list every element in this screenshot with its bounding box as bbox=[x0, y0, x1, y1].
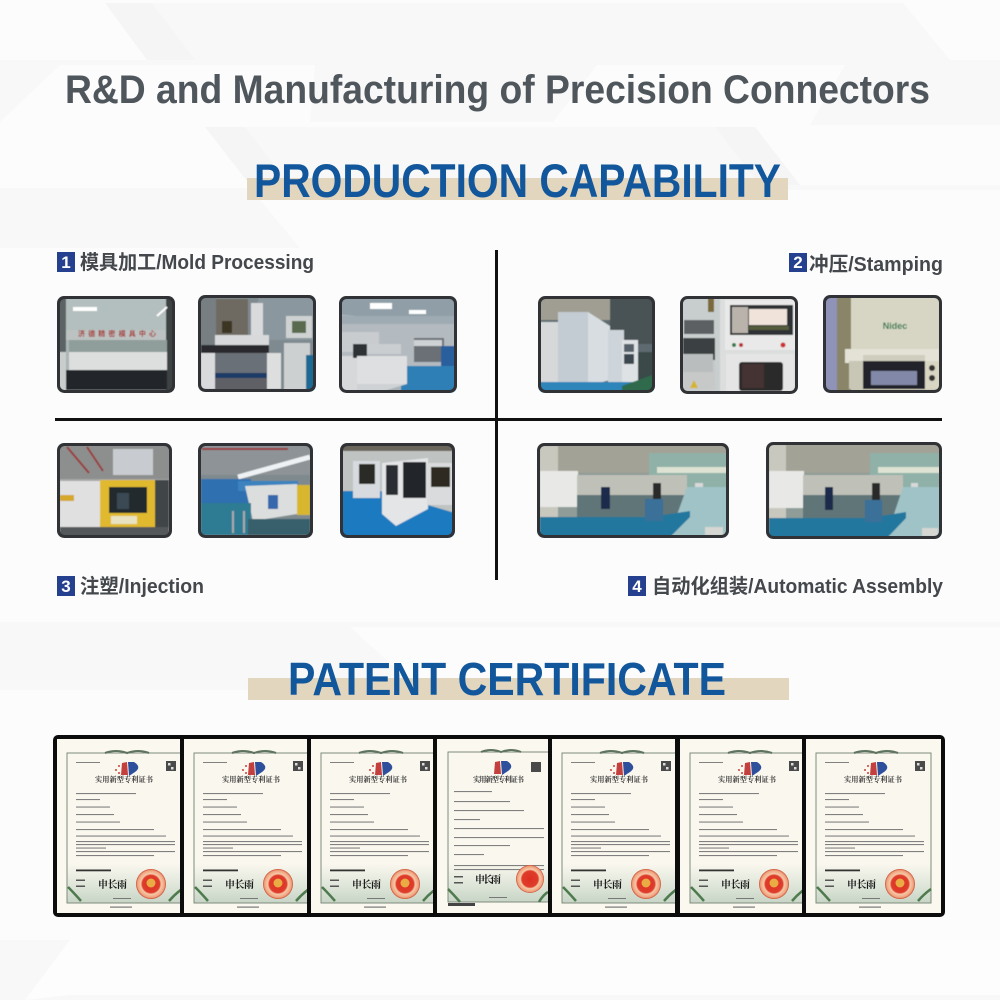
photo: stamping cabinets bbox=[538, 296, 655, 393]
label: stamping: 2 bbox=[793, 253, 803, 272]
photo: yellow injection machine bbox=[57, 443, 172, 538]
photo: mold center glass wall: 济德精密模具中心 bbox=[78, 329, 156, 338]
certificate 6 bbox=[680, 739, 802, 913]
certificate 4 bbox=[437, 739, 548, 913]
section 4: automatic assembly bbox=[537, 442, 944, 598]
certificate 5: 实用新型专利证书 bbox=[590, 775, 649, 784]
label: injection: 3 bbox=[61, 577, 71, 596]
certificate 7 bbox=[806, 739, 941, 913]
vertical divider bbox=[495, 250, 498, 580]
certificate 2 bbox=[184, 739, 307, 913]
heading: patent certificate: PATENT CERTIFICATE bbox=[288, 653, 726, 705]
horizontal divider bbox=[55, 418, 942, 421]
panel: patent certificates bbox=[53, 735, 945, 917]
label: mold processing: 模具加工/Mold Processing bbox=[80, 251, 314, 274]
certificate 7: 实用新型专利证书 bbox=[844, 775, 903, 784]
photo: wire cutting workshop bbox=[339, 296, 457, 393]
certificate 2: 实用新型专利证书 bbox=[222, 775, 281, 784]
section 3: injection bbox=[57, 443, 455, 598]
photo: edm machine bbox=[198, 295, 316, 392]
certificate 4: 实用新型专利证书 bbox=[473, 775, 525, 784]
label: stamping: 冲压/Stamping bbox=[809, 253, 943, 276]
photo: assembly line right bbox=[766, 442, 942, 539]
certificate 1: 实用新型专利证书 bbox=[95, 775, 154, 784]
certificate 6: 申长雨 bbox=[721, 876, 750, 891]
heading: production capability: PRODUCTION CAPABILITY bbox=[254, 154, 781, 207]
photo: nidec press bbox=[823, 295, 942, 393]
label: automatic assembly: 自动化组装/Automatic Assembly bbox=[652, 575, 944, 598]
certificate 3 bbox=[311, 739, 433, 913]
label: automatic assembly: 4 bbox=[632, 577, 642, 596]
certificate 5: 申长雨 bbox=[593, 876, 622, 891]
photo: automation cabinets bbox=[340, 443, 455, 538]
certificate 5 bbox=[552, 739, 675, 913]
photo: mold center glass wall bbox=[57, 296, 175, 393]
certificate 1: 申长雨 bbox=[98, 876, 127, 891]
certificate 2: 申长雨 bbox=[225, 876, 254, 891]
photo: nidec press: Nidec bbox=[883, 321, 907, 331]
label: mold processing: 1 bbox=[61, 253, 71, 272]
section 2: stamping bbox=[538, 253, 943, 394]
certificate 3: 实用新型专利证书 bbox=[349, 775, 408, 784]
certificate 1 bbox=[57, 739, 180, 913]
label: injection: 注塑/Injection bbox=[80, 575, 204, 598]
certificate 3: 申长雨 bbox=[352, 876, 381, 891]
photo: injection workshop line bbox=[198, 443, 313, 538]
photo: vision control panel bbox=[680, 296, 798, 394]
photo: assembly line left bbox=[537, 443, 729, 538]
certificate 7: 申长雨 bbox=[847, 876, 876, 891]
certificate 6: 实用新型专利证书 bbox=[718, 775, 777, 784]
title: R&D and Manufacturing of Precision Connectors bbox=[65, 68, 930, 112]
certificate 4: 申长雨 bbox=[475, 871, 501, 886]
section 1: mold processing bbox=[57, 251, 457, 393]
